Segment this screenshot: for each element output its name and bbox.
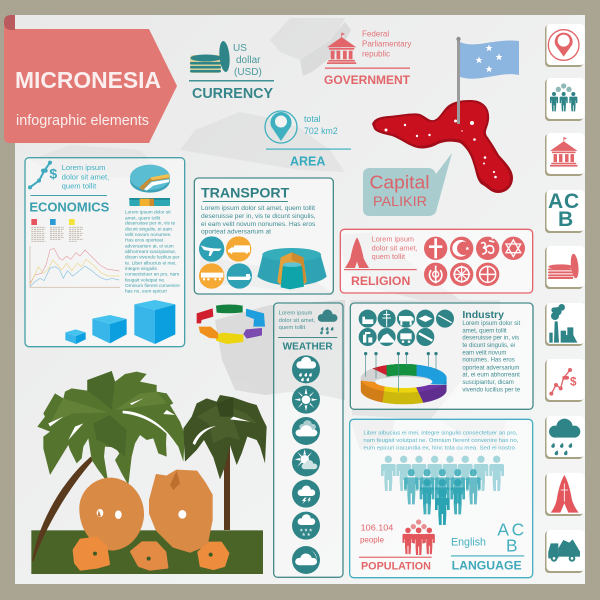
population heading: POPULATION: [361, 560, 431, 572]
industry text: te dicunt singulis, ei: [462, 343, 515, 349]
area value: total: [304, 114, 321, 124]
side tab: transport truck: [545, 530, 584, 573]
economics body text: adversarium at, ei eum: [125, 243, 174, 249]
population text: [363, 431, 519, 451]
currency name: dollar: [236, 55, 261, 66]
religion text: [372, 235, 418, 261]
weather text: Lorem ipsum: [279, 311, 312, 317]
small palm: [183, 395, 267, 530]
economics heading: ECONOMICS: [29, 199, 110, 214]
economics body text: integre singulis: [125, 266, 158, 272]
economics body text: Lorem ipsum dolor sit: [125, 210, 171, 216]
economics intro text: dolor sit amet,: [62, 172, 109, 181]
panel: weather: [274, 303, 343, 577]
industry pins: [364, 352, 438, 392]
transport text: oporteat adversarium at: [201, 229, 271, 236]
weather text: quem tollit: [279, 325, 306, 331]
economics body text: Omnium fierent convenire: [125, 283, 180, 289]
economics body text: dicunt singulis, ei eam: [125, 226, 172, 232]
icon: coins: [190, 41, 231, 73]
government type: Federal: [362, 30, 389, 38]
ring chart: loose segments: [197, 304, 265, 344]
economics body text: feugait volutpat ne.: [125, 277, 165, 283]
transport heading: TRANSPORT: [201, 185, 290, 201]
side tab: currency: [545, 246, 584, 289]
panel: religion: [340, 229, 533, 293]
side tab: language: B: [558, 208, 573, 231]
industry heading: Industry: [462, 310, 504, 321]
area value: 702 km2: [304, 126, 338, 136]
language letters: A: [497, 520, 509, 540]
economics intro text: Lorem ipsum: [62, 163, 105, 172]
transport text: [201, 205, 316, 236]
weather heading: WEATHER: [283, 341, 333, 352]
side tab: language: A: [548, 190, 563, 213]
population text: eum epicuri iracundia ex, hinc tota cu mea. Sed ei nostro: [363, 445, 515, 451]
icon: cloudy: [292, 417, 320, 445]
language heading: LANGUAGE: [452, 558, 522, 572]
icon: rain: [292, 355, 320, 383]
cylinder chart: [257, 248, 327, 289]
big palm: [32, 371, 185, 562]
icon: industry row one: [359, 310, 454, 328]
capital label: Capital: [370, 172, 430, 192]
pie chart: [130, 165, 170, 193]
flag pole: [456, 37, 461, 124]
weather text: [279, 311, 316, 331]
economics body text: amet, quem tollit: [125, 215, 161, 221]
economics body text: has no, eum epicuri: [125, 289, 167, 295]
religion text: Lorem ipsum: [372, 235, 414, 244]
industry text: suscipiantur, dicam: [462, 380, 514, 386]
economics intro text: quem tollit: [62, 182, 97, 191]
big stone disc left: [79, 478, 144, 551]
title text: MICRONESIA: [15, 67, 161, 93]
side tab: weather: [545, 416, 584, 459]
icon: industry row two: [359, 328, 434, 346]
flag: [460, 40, 519, 79]
language letters: [497, 520, 524, 556]
currency name: US: [233, 43, 247, 54]
industry text: nonumes. Has eros: [462, 358, 515, 364]
capital callout: [363, 153, 452, 216]
economics body text: te. Liber albucius ei mei,: [125, 260, 177, 266]
industry text: at, ei eum abhorreant: [462, 373, 520, 379]
big stone disc right: [150, 471, 212, 552]
icon: government building: [327, 33, 356, 64]
economics body text: Has eros oporteat: [125, 238, 164, 244]
population text: Liber albucius ei mei, integre singulis consectetuer an pro,: [363, 431, 518, 437]
economics body text: dicam vivendo lucilius per: [125, 255, 180, 261]
side tab: location: [545, 24, 584, 67]
icon: sun behind cloud: [292, 448, 320, 476]
icon: sun: [292, 386, 320, 414]
currency block: [189, 41, 274, 102]
icon: praying hands: [345, 237, 369, 268]
religion text: dolor sit amet,: [372, 243, 418, 252]
icon: thunder: [292, 480, 320, 508]
subtitle text: infographic elements: [16, 113, 149, 129]
government heading: GOVERNMENT: [324, 73, 410, 87]
icon: trend with dollar: [28, 161, 57, 189]
weather text: dolor sit amet,: [279, 318, 316, 324]
language letters: B: [506, 536, 518, 556]
language letters: C: [512, 520, 524, 540]
industry text: [462, 321, 521, 393]
side tab: economics: $: [570, 375, 577, 388]
icon: train: [199, 263, 224, 289]
panel: economics: [25, 158, 185, 347]
world map backdrop: [30, 18, 505, 450]
icon: om: [476, 237, 499, 260]
industry text: Lorem ipsum dolor sit: [462, 321, 520, 327]
map of Micronesia: [372, 100, 513, 193]
economics body text: velit novum nonumes.: [125, 232, 172, 238]
panel: industry: [350, 303, 533, 410]
icon: ship: [227, 263, 252, 289]
population value: [360, 524, 394, 544]
industry text: deseruisse per in, vis: [462, 336, 519, 342]
small stone disc one: [74, 538, 109, 569]
economics body text: deseruisse per in, vis te: [125, 221, 176, 227]
language name: English: [451, 537, 486, 549]
icon: location pin: [265, 111, 297, 143]
capital name: PALIKIR: [373, 193, 427, 209]
side tab: industry: [545, 303, 584, 346]
small stone disc two: [131, 543, 167, 569]
side tab: economics: [545, 359, 584, 402]
government block: [324, 30, 411, 87]
industry text: vivendo lucilius per te: [462, 387, 521, 393]
3d cube bars: [65, 300, 175, 344]
small stone disc three: [199, 543, 228, 569]
panel: transport: [194, 178, 333, 294]
area block: [265, 111, 351, 168]
icon: khanda: [424, 263, 447, 286]
icon: cross: [424, 237, 447, 260]
population value: people: [360, 535, 385, 544]
government type: Parliamentary: [362, 40, 411, 48]
icon: cloud with moon: [292, 546, 320, 574]
icon: people group: [402, 519, 435, 555]
industry text: eam velit novum: [462, 350, 506, 356]
ring chart: [360, 364, 447, 404]
side tab: religion: [545, 473, 584, 516]
religion text: quem tollit: [372, 252, 405, 261]
icon: circled cross: [476, 263, 499, 286]
currency name: (USD): [234, 67, 262, 78]
icon: crescent: [450, 237, 473, 260]
icon: rain cloud: [318, 310, 337, 335]
bar band chart: [129, 198, 170, 206]
panel: population and language: [350, 419, 533, 578]
side tab: government: [545, 133, 584, 176]
economics intro text: [62, 163, 109, 191]
economics body text: consectetuer an pro, nam: [125, 272, 179, 278]
line chart: [30, 246, 120, 287]
transport text: deseruisse per in, vis te dicunt singulis,: [201, 213, 316, 220]
industry text: amet, quem tollit: [462, 328, 507, 334]
side tab: language: C: [564, 190, 579, 213]
line chart legend: [31, 219, 83, 241]
currency heading: CURRENCY: [192, 86, 273, 102]
icon: star of David: [502, 237, 525, 260]
icon: airplane: [199, 236, 224, 262]
transport text: Lorem ipsum dolor sit amet, quem tollit: [201, 205, 315, 212]
icon: truck: [226, 236, 251, 262]
transport text: ei eam velit novum nonumes. Has eros: [201, 221, 316, 228]
currency name: [233, 43, 262, 78]
population text: nam feugait volutpat ne. Omnium fierent convenire has no,: [363, 438, 519, 444]
title banner: [4, 15, 177, 143]
icon: trend with dollar: $: [49, 166, 57, 182]
ground: [31, 530, 263, 574]
government type: republic: [362, 50, 390, 58]
area value: [304, 114, 338, 136]
icon: dharma wheel: [450, 263, 473, 286]
economics body text: abhorreant suscipiantur,: [125, 249, 176, 255]
area heading: AREA: [290, 154, 325, 168]
side tab: population: [545, 78, 584, 121]
economics body text: [125, 210, 180, 295]
icon: snow: [292, 512, 320, 540]
religion heading: RELIGION: [351, 274, 410, 288]
side tab: language: [545, 190, 584, 233]
illustration: palms and stone money: [31, 371, 267, 574]
population value: 106.104: [361, 524, 394, 533]
government type: [362, 30, 411, 58]
industry text: oporteat adversarium: [462, 365, 519, 371]
people pictogram: [381, 456, 504, 525]
